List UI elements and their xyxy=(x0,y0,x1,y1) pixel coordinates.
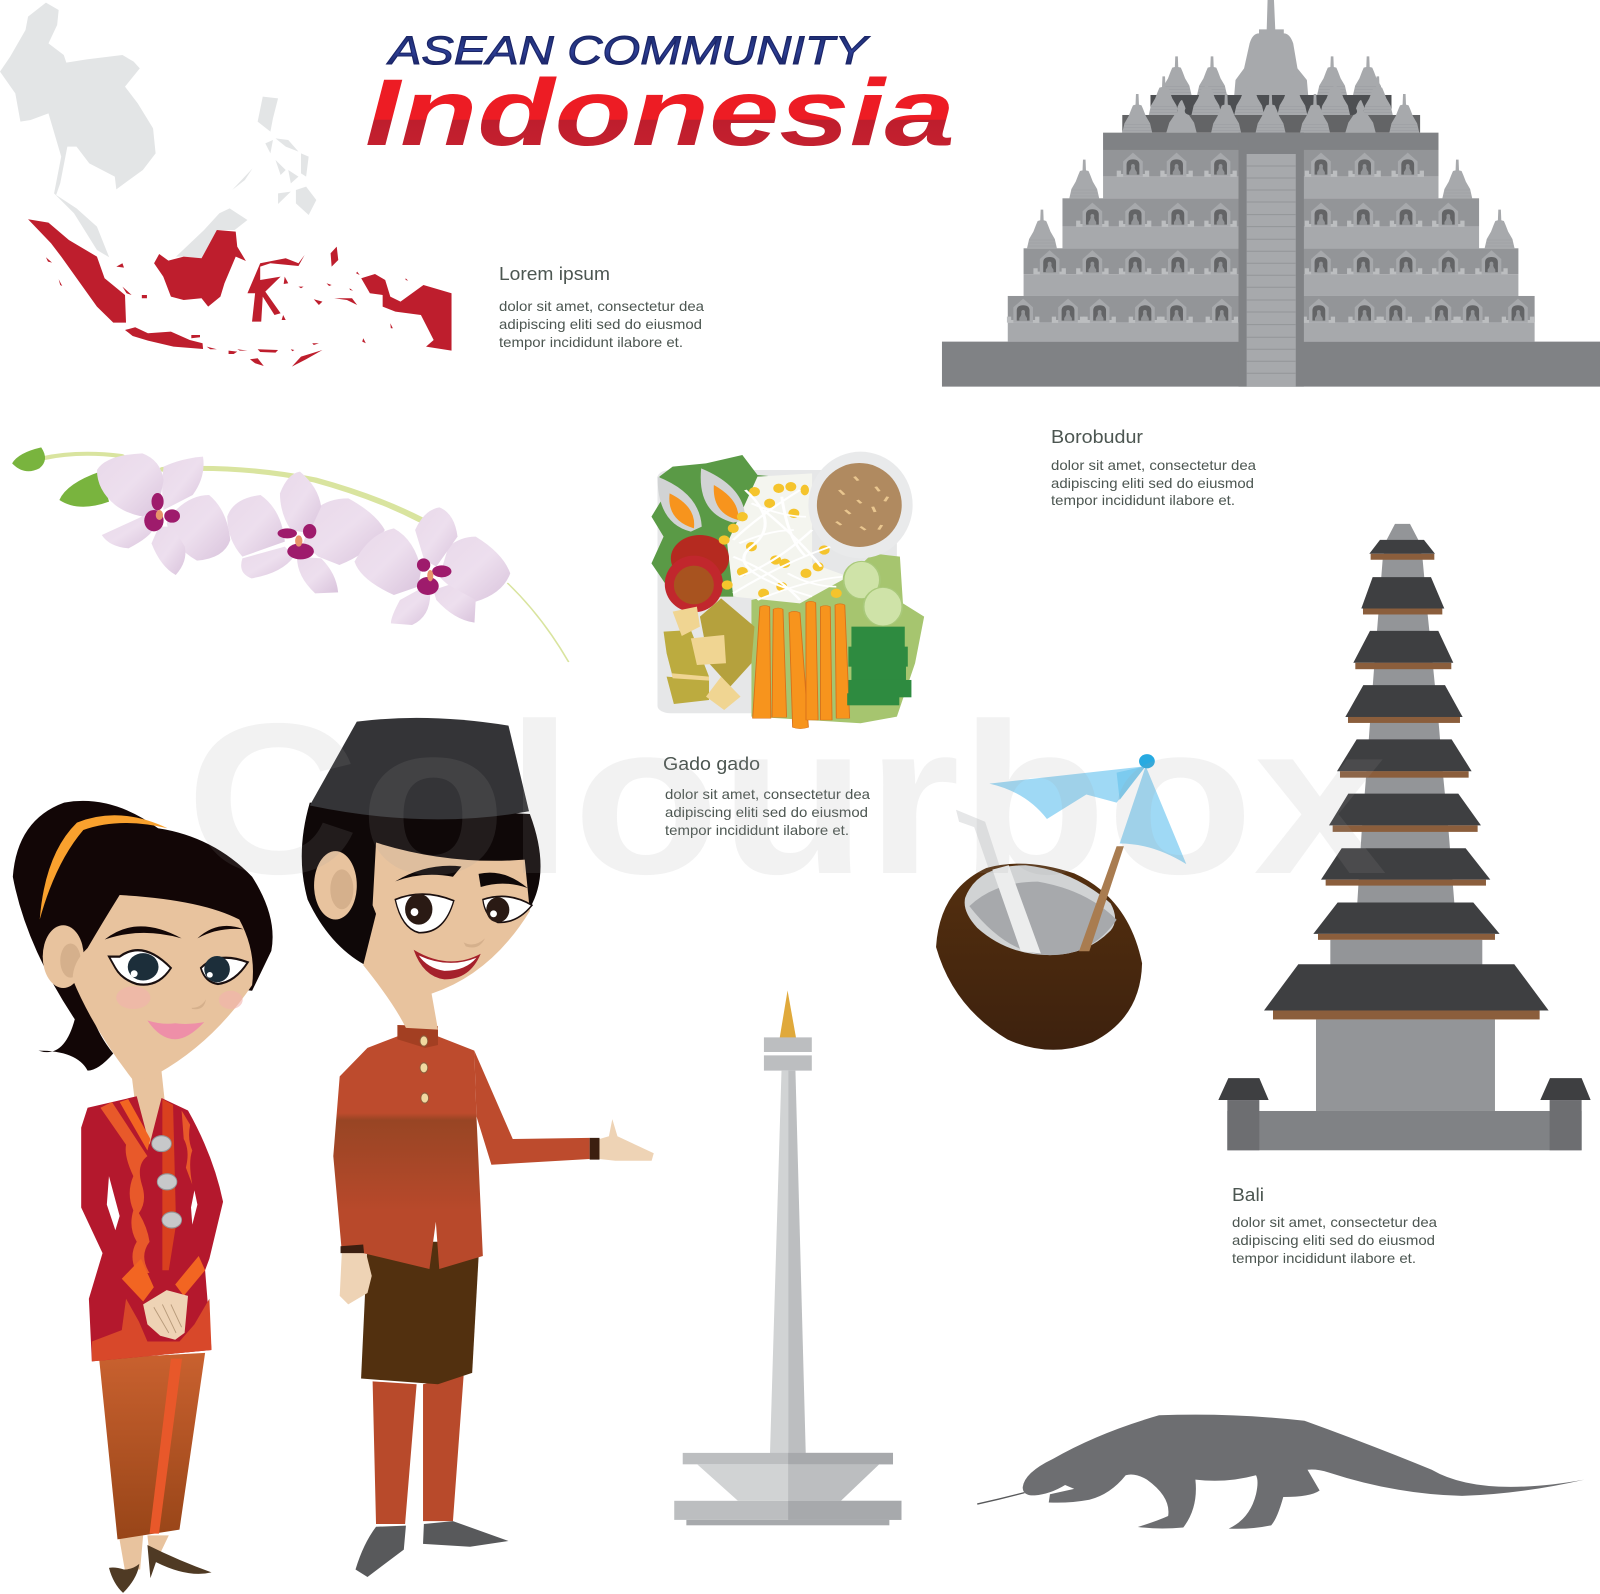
carrots xyxy=(753,601,850,729)
eyes and brows xyxy=(105,926,248,985)
sauce bowl xyxy=(808,452,913,558)
text block: Gado gado xyxy=(663,753,870,838)
national monument xyxy=(674,991,901,1525)
hands xyxy=(143,1290,188,1340)
text block: Gado gado: adipiscing eliti sed do eiusmod xyxy=(665,804,868,820)
heading: ASEAN COMMUNITY: ASEAN COMMUNITY xyxy=(387,29,871,73)
monument base xyxy=(674,1453,901,1525)
text block: Lorem ipsum: tempor incididunt ilabore et. xyxy=(499,334,683,350)
observation platform xyxy=(764,1037,812,1071)
small stupas xyxy=(1027,56,1515,248)
leaves xyxy=(12,447,109,507)
flower 3 xyxy=(355,507,510,625)
niches xyxy=(1007,153,1534,323)
central stairway xyxy=(1239,133,1304,387)
text block: Borobudur: tempor incididunt ilabore et. xyxy=(1051,492,1235,508)
roof tiers xyxy=(1264,540,1549,1019)
head xyxy=(302,803,541,1030)
text block: Bali xyxy=(1232,1184,1437,1266)
lettuce xyxy=(651,455,924,723)
heading: Indonesia: Indonesia xyxy=(365,60,955,166)
title xyxy=(365,29,955,166)
top terraces xyxy=(1150,95,1391,115)
orchid illustration xyxy=(12,447,568,662)
face xyxy=(43,895,253,1082)
Indonesia in red xyxy=(28,219,452,367)
coconut drink xyxy=(936,754,1186,1050)
stick xyxy=(1079,846,1124,951)
trousers xyxy=(373,1376,464,1524)
flower 2 xyxy=(227,472,385,593)
hands xyxy=(340,1119,654,1304)
straw xyxy=(992,865,1041,953)
jacket xyxy=(81,1096,223,1361)
mainland and neighbours in grey xyxy=(0,3,316,258)
text block: Borobudur: dolor sit amet, consectetur dea xyxy=(1051,457,1256,473)
tomatoes xyxy=(665,535,729,612)
SE Asia and Indonesia map xyxy=(0,3,452,367)
shirt buttons xyxy=(420,1036,429,1103)
text block: Lorem ipsum: dolor sit amet, consectetur dea xyxy=(499,298,704,314)
text block: Bali: Bali xyxy=(1232,1184,1264,1205)
text block: Lorem ipsum: Lorem ipsum xyxy=(499,263,610,284)
eggs xyxy=(658,468,745,532)
plate xyxy=(658,470,897,713)
woman in traditional dress xyxy=(13,801,273,1593)
text block: Borobudur: adipiscing eliti sed do eiusmod xyxy=(1051,475,1254,491)
skirt xyxy=(99,1353,205,1539)
face details xyxy=(395,866,532,979)
text block: Bali: adipiscing eliti sed do eiusmod xyxy=(1232,1232,1435,1248)
coconut opening xyxy=(965,865,1117,955)
gado gado plate xyxy=(651,452,924,729)
parasol xyxy=(989,754,1186,864)
Bali pagoda xyxy=(1218,524,1591,1150)
cap xyxy=(310,718,529,819)
text block: Bali: tempor incididunt ilabore et. xyxy=(1232,1250,1416,1266)
man in traditional dress xyxy=(302,718,654,1577)
Borobudur temple xyxy=(942,0,1600,387)
temple tiers xyxy=(942,133,1600,387)
komodo dragon xyxy=(977,1415,1584,1529)
main stupa xyxy=(1234,0,1308,95)
stems xyxy=(42,454,568,662)
text block: Borobudur xyxy=(1051,426,1256,508)
bean sprouts and corn xyxy=(719,482,842,600)
shoes xyxy=(356,1521,508,1577)
shoes xyxy=(109,1545,212,1593)
text block: Borobudur: Borobudur xyxy=(1051,426,1143,447)
text block: Gado gado: tempor incididunt ilabore et. xyxy=(665,822,849,838)
sarong xyxy=(361,1242,479,1384)
straw top xyxy=(956,810,1000,871)
jacket buttons xyxy=(152,1136,182,1228)
cucumber xyxy=(844,561,902,626)
text block: Bali: dolor sit amet, consectetur dea xyxy=(1232,1214,1437,1230)
hairband xyxy=(40,815,168,920)
obelisk xyxy=(770,1071,788,1453)
hair back xyxy=(13,801,273,1071)
flower 1 xyxy=(97,453,230,575)
coconut shell xyxy=(936,864,1142,1050)
shirt xyxy=(333,1025,600,1269)
text block: Gado gado: dolor sit amet, consectetur dea xyxy=(665,786,870,802)
text block: Gado gado: Gado gado xyxy=(663,753,760,774)
base wall and posts xyxy=(1218,1078,1591,1150)
text block: Lorem ipsum: adipiscing eliti sed do eiusmod xyxy=(499,316,702,332)
text block: Lorem ipsum xyxy=(499,263,704,350)
gold flame xyxy=(780,991,796,1038)
legs xyxy=(119,1535,169,1570)
tofu and tempeh xyxy=(664,598,754,710)
neck xyxy=(130,1059,165,1150)
watermark: Colourbox xyxy=(186,678,1387,919)
green vegetables xyxy=(847,627,911,705)
tower body xyxy=(1316,524,1495,1111)
